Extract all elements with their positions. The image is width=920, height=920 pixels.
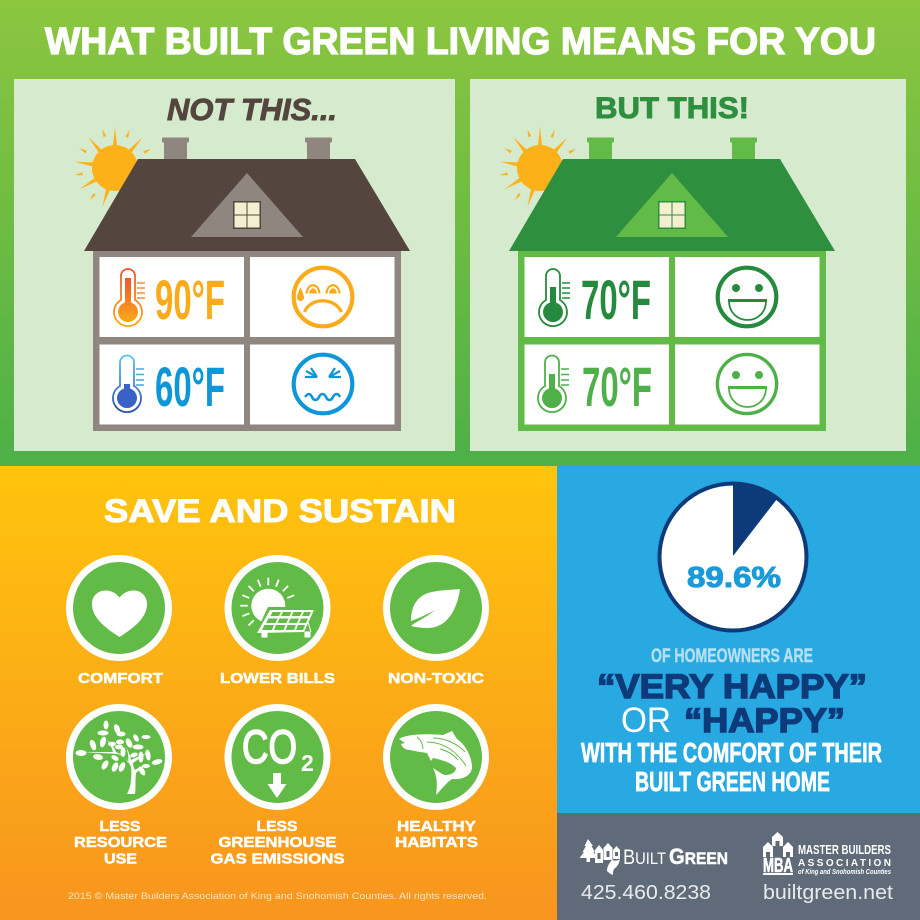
house: brown (84, 138, 410, 431)
text: or happy: OR (621, 701, 671, 740)
icon: non-toxic leaf (386, 558, 486, 658)
text: or happy: “HAPPY” (684, 702, 845, 740)
label: less resource use (74, 818, 167, 868)
text: of homeowners are: OF HOMEOWNERS ARE (651, 646, 813, 667)
pie chart: 89.6 percent: 89.6% (687, 562, 781, 594)
reading: lower 70F: 70°F (582, 355, 652, 418)
logo: master builders association: MASTER BUILDERS (798, 842, 891, 857)
label: less greenhouse gas emissions: LESS (256, 818, 298, 835)
house: green (509, 138, 835, 431)
logo: built green: BUILT (623, 846, 666, 869)
panel: but this (470, 79, 906, 451)
label: lower bills: LOWER BILLS (220, 670, 335, 687)
heading: but this: BUT THIS! (595, 92, 749, 125)
reading: upper 70F: 70°F (581, 268, 651, 331)
icon: comfort heart (70, 558, 168, 658)
logo: built green: GREEN (669, 844, 728, 869)
logo: master builders association (763, 832, 891, 877)
icon: crying face (294, 268, 352, 326)
contact: phone: 425.460.8238 (581, 882, 711, 904)
icon: happy face dark (718, 268, 776, 326)
icon: cold thermometer (113, 356, 144, 412)
panel: homeowner statistic (557, 466, 920, 813)
icon: happy face light (717, 354, 777, 414)
label: healthy habitats: HABITATS (395, 834, 478, 851)
text: very happy: “VERY HAPPY” (597, 668, 867, 706)
label: less greenhouse gas emissions: GREENHOUSE (218, 834, 336, 851)
background: green header band (0, 0, 920, 466)
panel: footer contact (557, 813, 920, 920)
label: less resource use: RESOURCE (74, 834, 167, 851)
icon: less greenhouse gas co2 (228, 708, 327, 806)
text: or happy (621, 701, 845, 740)
logo: built green (580, 839, 728, 875)
icon: lower bills solar panel (228, 558, 327, 658)
icon: thermometer upper (539, 269, 570, 326)
text: with the comfort (581, 737, 882, 797)
icon: healthy habitats fish (386, 708, 486, 806)
icon: thermometer lower (538, 356, 569, 412)
icon: hot thermometer (114, 269, 145, 326)
label: non-toxic: NON-TOXIC (388, 670, 484, 687)
icon: sun (74, 127, 152, 208)
label: comfort: COMFORT (78, 670, 163, 687)
panel: not this (14, 79, 455, 451)
logo: master builders association: of King and Snohomish Counties (798, 869, 891, 876)
reading: 90F: 90°F (155, 268, 225, 331)
label: less greenhouse gas emissions (210, 818, 344, 868)
label: less resource use: USE (104, 850, 137, 868)
icon: less resource use tree (70, 708, 168, 806)
icon: sun (499, 127, 577, 208)
label: healthy habitats: HEALTHY (397, 818, 476, 835)
icon: less greenhouse gas co2: 2 (301, 750, 314, 776)
heading: not this: NOT THIS... (167, 92, 337, 127)
panel: save and sustain (0, 466, 557, 920)
label: less resource use: LESS (100, 818, 140, 835)
label: healthy habitats (395, 818, 478, 851)
logo: master builders association: MBA (763, 855, 793, 877)
pie chart: 89.6 percent (660, 484, 806, 630)
reading: 60F: 60°F (155, 355, 225, 418)
copyright: 2015 © Master Builders Association of King and Snohomish Counties. All rights reserved. (68, 891, 487, 902)
title: WHAT BUILT GREEN LIVING MEANS FOR YOU (45, 21, 876, 63)
label: less greenhouse gas emissions: GAS EMISSIONS (210, 850, 344, 868)
contact: website: builtgreen.net (763, 882, 893, 904)
text: with the comfort: BUILT GREEN HOME (635, 766, 830, 797)
logo: master builders association: ASSOCIATION (798, 858, 891, 869)
heading: save and sustain: SAVE AND SUSTAIN (104, 493, 456, 529)
icon: less greenhouse gas co2: CO (242, 720, 297, 773)
icon: shivering face (294, 355, 352, 413)
